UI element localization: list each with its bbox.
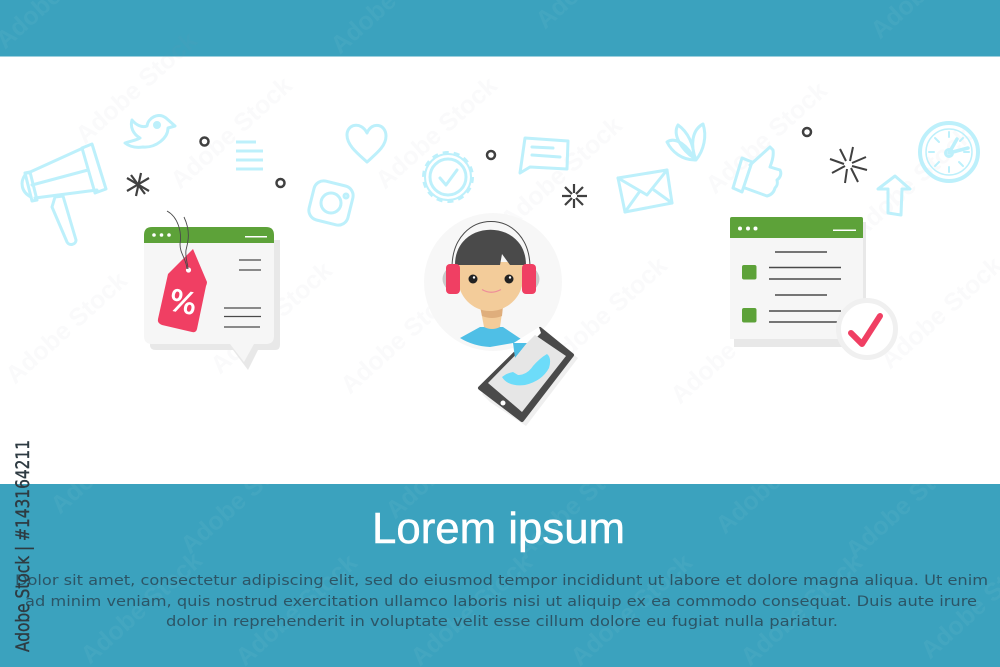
- icon: leaf: [667, 124, 705, 160]
- decorative dark rings and asterisks: [127, 128, 867, 208]
- watermark on blue bands: Adobe Stock: [380, 401, 513, 524]
- ring 4: [803, 128, 811, 136]
- icon: envelope: [618, 170, 672, 212]
- watermark on white area: Adobe Stock: [700, 76, 833, 199]
- window body: [144, 240, 274, 362]
- watermark on white area: Adobe Stock: [665, 286, 798, 409]
- tag strings: [167, 211, 188, 269]
- watermark on white area: Adobe Stock: [70, 26, 203, 149]
- icon: twitter bird: [125, 116, 175, 147]
- checkbox 2: [742, 308, 756, 322]
- avatar circle: [424, 213, 562, 351]
- check mark: [851, 316, 880, 344]
- bottom band: [0, 484, 1000, 667]
- floating outline icons: [22, 116, 978, 244]
- tablet button: [500, 400, 506, 406]
- checkbox 1: [742, 265, 756, 280]
- icon: thumbs up: [733, 147, 781, 196]
- asterisk 1: [127, 173, 149, 196]
- tag hole: [186, 267, 191, 273]
- text lines: [224, 260, 261, 327]
- watermark on white area: [0, 26, 1000, 409]
- watermark on blue bands: Adobe Stock: [510, 441, 643, 564]
- price tag: [158, 249, 207, 332]
- icon: megaphone: [22, 144, 106, 244]
- neck: [480, 306, 503, 329]
- watermark on blue bands: Adobe Stock: [710, 416, 843, 539]
- body text: [15, 573, 988, 630]
- speech bubble shadow: [150, 240, 280, 370]
- watermark on blue bands: Adobe Stock: [175, 436, 308, 559]
- icon: up arrow: [878, 176, 910, 215]
- neck shadow: [480, 306, 503, 318]
- shirt: [460, 327, 527, 347]
- watermark on blue bands: Adobe Stock: [840, 441, 973, 564]
- headband: [452, 222, 530, 268]
- text lines: [769, 252, 841, 322]
- watermark on white area: Adobe Stock: [0, 266, 133, 389]
- window body: [730, 217, 863, 339]
- watermark on white area: Adobe Stock: [205, 256, 338, 379]
- panel: support agent with phone: [424, 213, 578, 426]
- watermark on blue bands: Adobe Stock: [75, 546, 208, 667]
- watermark on blue bands: Adobe Stock: [45, 396, 178, 519]
- ring 2: [276, 179, 284, 187]
- asterisk 2: [562, 184, 587, 208]
- smile: [482, 290, 501, 292]
- tag percent sign: %: [166, 283, 200, 322]
- handset icon: [502, 354, 550, 385]
- panel: discount browser window: [144, 211, 280, 370]
- ring 3: [487, 151, 495, 159]
- window shadow: [734, 222, 866, 347]
- header dots: [152, 233, 267, 238]
- ear cups grey: [442, 269, 540, 289]
- window header: [730, 217, 863, 238]
- icon: instagram: [307, 179, 355, 227]
- watermark on white area: Adobe Stock: [495, 111, 628, 234]
- watermark on white area: Adobe Stock: [370, 71, 503, 194]
- tablet screen: [488, 335, 566, 412]
- header dots: [738, 226, 856, 231]
- stock id label: Adobe Stock | #143164211: [12, 440, 34, 652]
- ring 1: [200, 138, 208, 146]
- hair: [455, 230, 526, 265]
- check badge: [838, 300, 896, 358]
- watermark on white area: Adobe Stock: [165, 71, 298, 194]
- window header: [144, 227, 274, 243]
- face: [458, 262, 523, 311]
- body text: ad minim veniam, quis nostrud exercitation ullamco laboris nisi ut aliquip ex ea commodo consequat. Duis aute irure: [25, 594, 977, 610]
- panel: checklist browser window: [730, 217, 896, 358]
- icon: clock: [920, 123, 978, 181]
- watermark on white area: Adobe Stock: [335, 276, 468, 399]
- top band: [0, 0, 1000, 56]
- body text: dolor in reprehenderit in voluptate velit esse cillum dolore eu fugiat nulla pariatur.: [166, 614, 838, 630]
- tablet shadow: [482, 332, 578, 426]
- title: Lorem ipsum: [372, 504, 625, 553]
- speech pointer: [513, 343, 527, 358]
- speech pointer gap: [512, 327, 541, 358]
- icon: text list: [236, 142, 263, 169]
- ear cups red: [446, 264, 460, 294]
- icon: heart: [347, 125, 386, 162]
- watermark on white area: Adobe Stock: [845, 121, 978, 244]
- asterisk 3: [830, 147, 867, 183]
- body text: Dolor sit amet, consectetur adipiscing elit, sed do eiusmod tempor incididunt ut labore et dolore magna aliqua. Ut enim: [15, 573, 988, 589]
- watermark on white area: Adobe Stock: [540, 251, 673, 374]
- screen patch under pointer: [515, 335, 545, 362]
- icon: chat bubble: [520, 138, 568, 173]
- icon: verified badge: [424, 152, 472, 202]
- tablet: [480, 329, 572, 420]
- eyes: [468, 274, 478, 284]
